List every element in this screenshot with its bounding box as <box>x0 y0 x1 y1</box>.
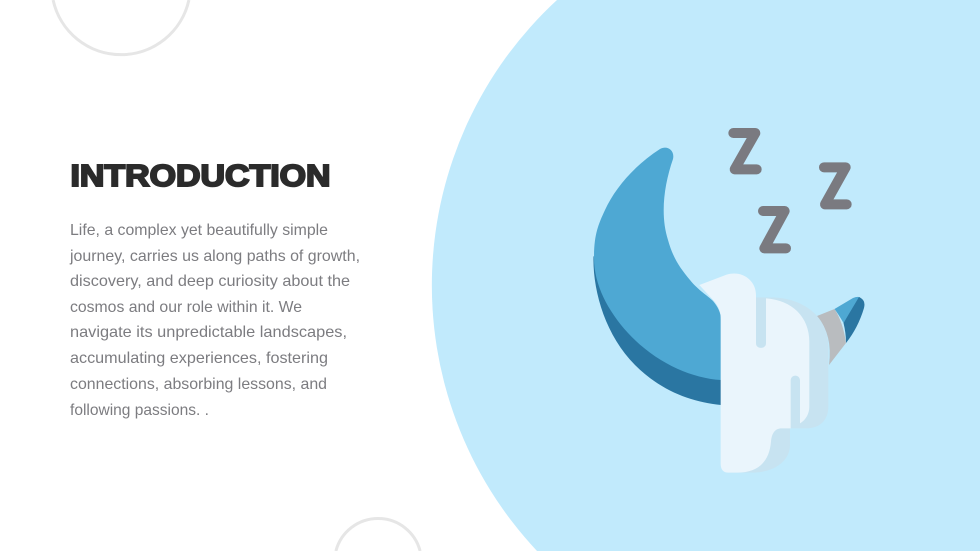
Z top <box>733 133 757 169</box>
body text <box>69 222 360 419</box>
icon: letters Z <box>733 133 847 248</box>
icon: sleeping moon <box>593 133 864 473</box>
moon dark edge <box>593 256 721 405</box>
moon tip gray band <box>817 309 846 365</box>
moon tip blue <box>834 297 860 323</box>
clouds <box>699 274 828 473</box>
body text: cosmos and our role within it. We <box>70 299 302 316</box>
Z middle <box>763 211 786 248</box>
top outlined circle <box>53 0 189 55</box>
body text: discovery, and deep curiosity about the <box>70 273 350 290</box>
body text: Life, a complex yet beautifully simple <box>70 222 328 239</box>
back cloud shadow <box>730 297 828 473</box>
body text: journey, carries us along paths of growth, <box>69 248 360 265</box>
title: INTRODUCTION <box>70 158 330 193</box>
front cloud <box>699 274 809 473</box>
moon body <box>594 148 721 380</box>
body text: connections, absorbing lessons, and <box>70 376 327 393</box>
large light blue circle <box>432 0 980 551</box>
moon tip dark <box>844 297 864 343</box>
Z right <box>824 167 847 204</box>
bottom outlined circle <box>336 518 420 551</box>
body text: following passions. . <box>70 402 209 419</box>
body text: navigate its unpredictable landscapes, <box>70 324 347 341</box>
body text: accumulating experiences, fostering <box>70 350 328 367</box>
